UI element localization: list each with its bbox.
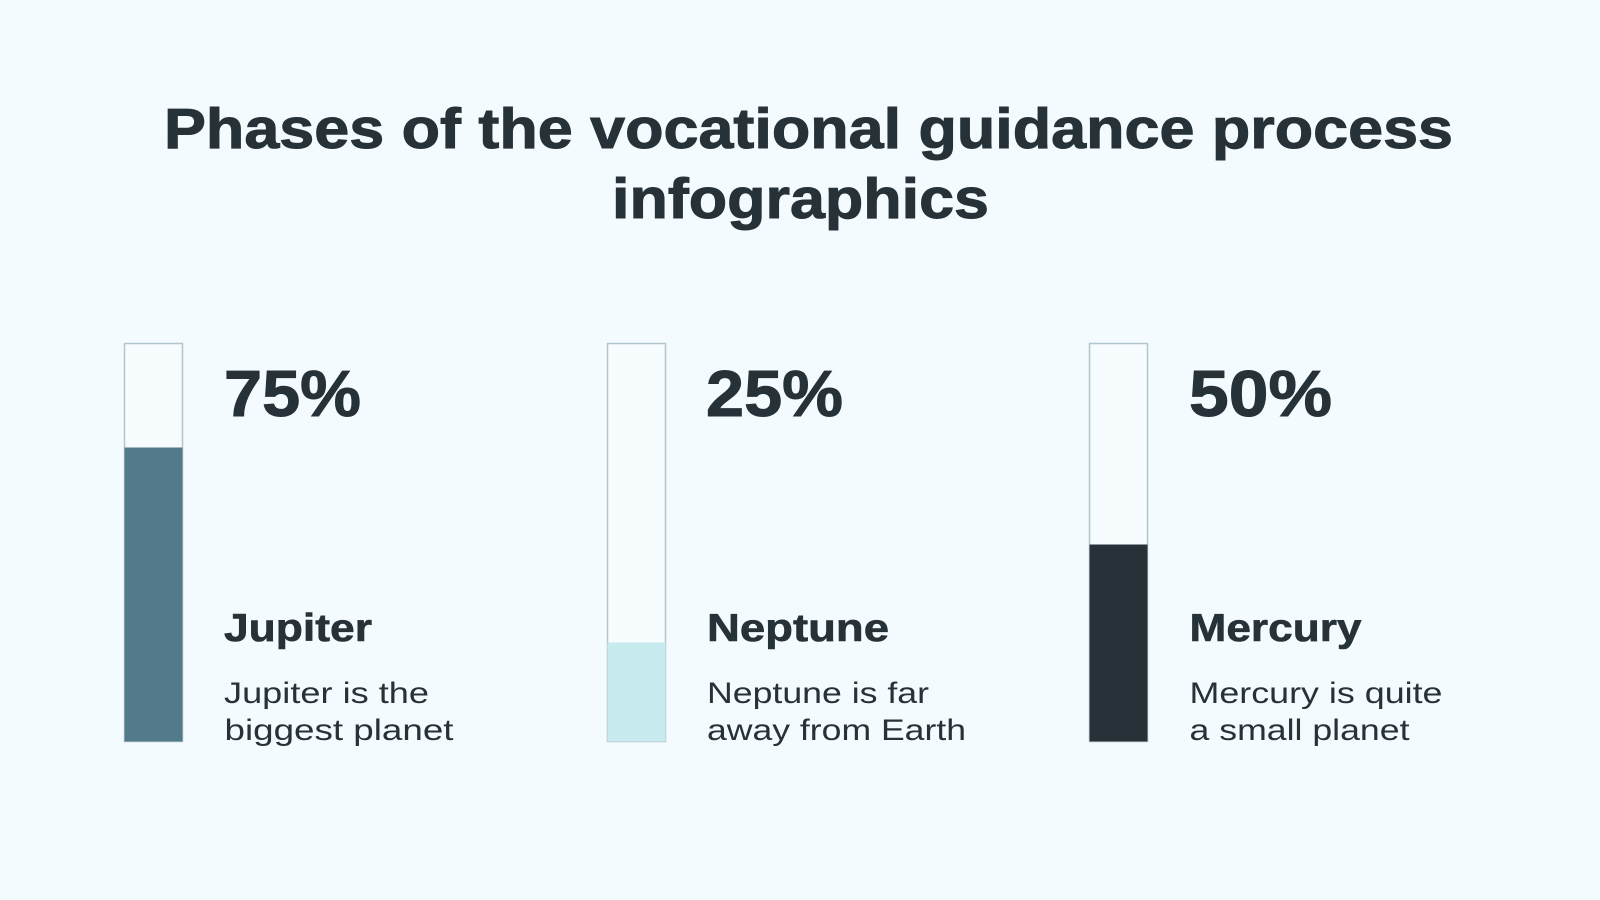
text block: Jupiter description: Jupiter is the (224, 677, 429, 710)
bar chart: Mercury 50% (1090, 344, 1148, 742)
panel: Neptune (608, 344, 966, 747)
text block: Neptune description: away from Earth (707, 714, 966, 747)
heading: Neptune: Neptune (707, 607, 889, 650)
text block: Mercury description: a small planet (1190, 714, 1410, 747)
title: infographics (612, 167, 989, 231)
text block: Mercury description: Mercury is quite (1190, 677, 1442, 710)
title (164, 97, 1453, 231)
panel: Mercury (1090, 344, 1442, 747)
bar chart: Jupiter 75% (124, 344, 182, 742)
heading: Mercury: Mercury (1190, 607, 1362, 650)
heading: Jupiter: Jupiter (224, 607, 372, 650)
text block: Neptune description: Neptune is far (707, 677, 929, 710)
text block: Mercury description (1190, 677, 1442, 747)
title: Phases of the vocational guidance process (164, 97, 1453, 161)
percentage: 75%: 75% (224, 357, 361, 430)
text block: Jupiter description: biggest planet (224, 714, 454, 747)
percentage: 50%: 50% (1189, 357, 1332, 430)
percentage: 25%: 25% (706, 357, 843, 430)
bar chart: Neptune 25% (608, 344, 666, 742)
panel: Jupiter (124, 344, 454, 747)
text block: Jupiter description (224, 677, 454, 747)
text block: Neptune description (707, 677, 966, 747)
